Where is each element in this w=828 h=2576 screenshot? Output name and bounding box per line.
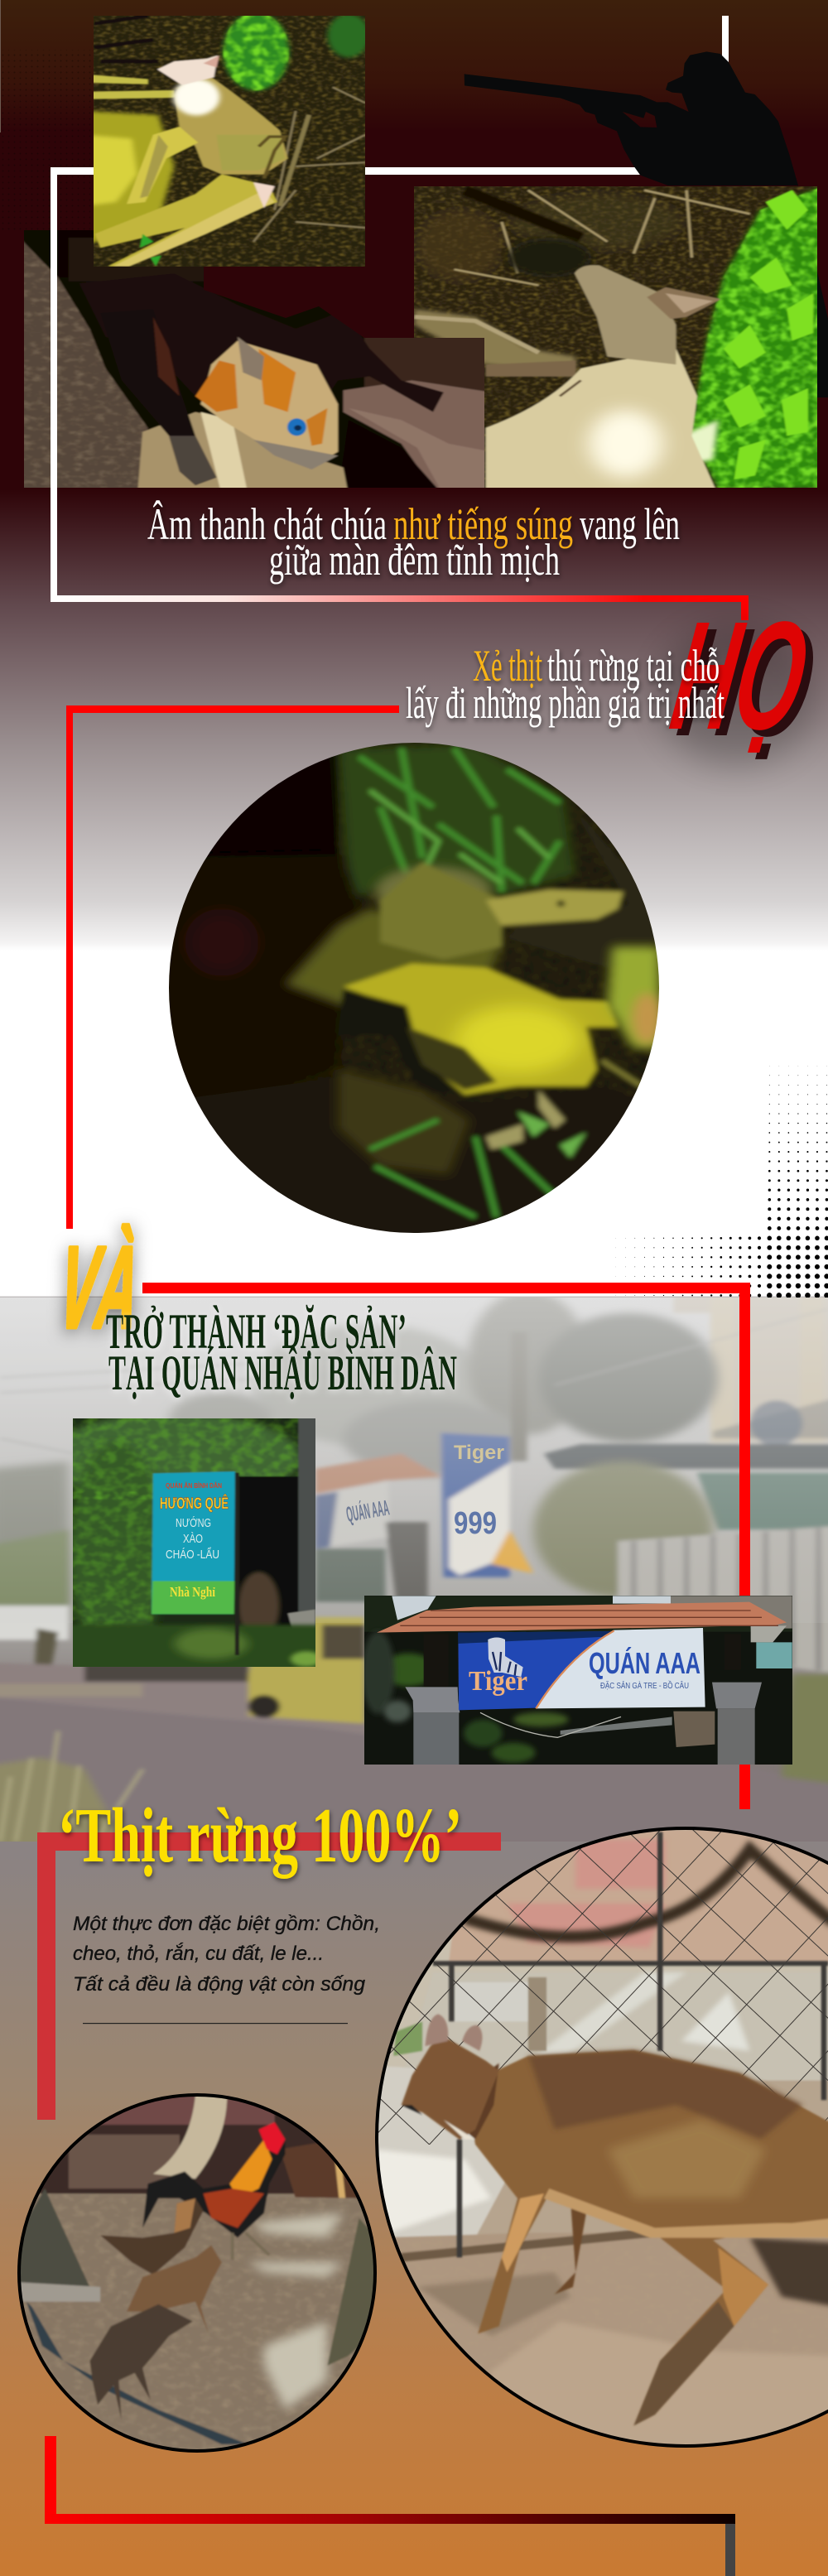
red L connector to circular photo — [66, 705, 399, 1229]
photo: roadside signboard Huong Que: CHÁO -LẨU — [166, 1547, 219, 1562]
heading: become a specialty at street pubs — [106, 1304, 457, 1400]
photo: circular butchered animal, blurred — [169, 743, 659, 1233]
heading: gunshot sound in the night: như tiếng súng — [393, 499, 573, 549]
icon: hunter with rifle silhouette — [465, 51, 828, 397]
heading: 100% wild meat: ‘Thịt rừng 100%’ — [58, 1793, 462, 1879]
photo: roadside signboard Huong Que: Nhà Nghỉ — [170, 1584, 215, 1600]
photo: Tiger beer signboard Quan AAA: ĐẶC SẢN GÀ TRE - BỒ CÂU — [600, 1680, 689, 1691]
text block: special menu: cheo, thỏ, rắn, cu đất, le le... — [73, 1943, 324, 1965]
photo: dead deer lying in yellow-lit undergrowth — [94, 16, 365, 267]
white frame top bar and top-right stub — [57, 16, 729, 175]
red bracket behind title, panel 3 — [37, 1832, 501, 2120]
red connector stub — [741, 595, 749, 620]
photo: Tiger beer signboard Quan AAA: Tiger — [469, 1666, 527, 1697]
photo: circular caged muntjac deer — [369, 1820, 828, 2459]
heading: become a specialty at street pubs: TRỞ THÀNH ‘ĐẶC SẢN’ — [106, 1304, 407, 1359]
heading: butcher the animals on the spot: Xẻ thịt — [473, 641, 542, 691]
photo: roadside signboard Huong Que — [73, 1418, 315, 1667]
photo: roadside signboard Huong Que: NƯỚNG — [176, 1516, 211, 1530]
photo: roadside signboard Huong Que: QUÁN ĂN BÌNH DÂN — [166, 1482, 222, 1490]
text block: special menu: Tất cả đều là động vật còn sống — [73, 1973, 366, 1996]
heading: gunshot sound in the night: Âm thanh chát chúa — [147, 499, 387, 549]
text block: special menu: Một thực đơn đặc biệt gồm: Chồn, — [73, 1913, 380, 1935]
text block: special menu — [73, 1913, 380, 1996]
photo: Tiger beer signboard Quan AAA — [362, 1596, 792, 1765]
halftone dot decoration — [616, 1066, 828, 1300]
heading: gunshot sound in the night — [147, 499, 680, 585]
photo: roadside signboard Huong Que: XÀO — [183, 1532, 203, 1546]
photo: misty street background with roadside eatery: Tiger — [454, 1442, 504, 1464]
heading: gunshot sound in the night: vang lên — [580, 499, 680, 549]
photo: dead civet with orange head — [16, 226, 491, 495]
photo: misty street background with roadside eatery: QUÁN AAA — [344, 1495, 391, 1527]
photo: misty street background with roadside eatery — [0, 1290, 828, 1849]
faint halftone texture top left — [0, 0, 94, 232]
white frame left side — [51, 167, 57, 602]
heading: butcher the animals on the spot — [406, 641, 724, 728]
heading: butcher the animals on the spot: thú rừng tại chỗ — [547, 641, 720, 691]
photo: circular rooster, hens and mouse deer — [11, 2090, 386, 2459]
photo: dead deer beside bright green leaves — [414, 186, 817, 488]
heading: become a specialty at street pubs: TẠI QUÁN NHẬU BÌNH DÂN — [108, 1346, 457, 1400]
gradient frame bottom bar — [51, 595, 749, 602]
red L connector around street section — [142, 1283, 750, 1809]
heading: gunshot sound in the night: giữa màn đêm tĩnh mịch — [269, 535, 560, 585]
photo: Tiger beer signboard Quan AAA: QUÁN AAA — [589, 1646, 700, 1680]
title word: VÀ: VÀ — [54, 1222, 145, 1352]
bottom bracket with gradient — [45, 2436, 735, 2576]
photo: misty street background with roadside eatery: 999 — [454, 1506, 497, 1541]
photo: roadside signboard Huong Que: HƯƠNG QUÊ — [160, 1495, 229, 1513]
